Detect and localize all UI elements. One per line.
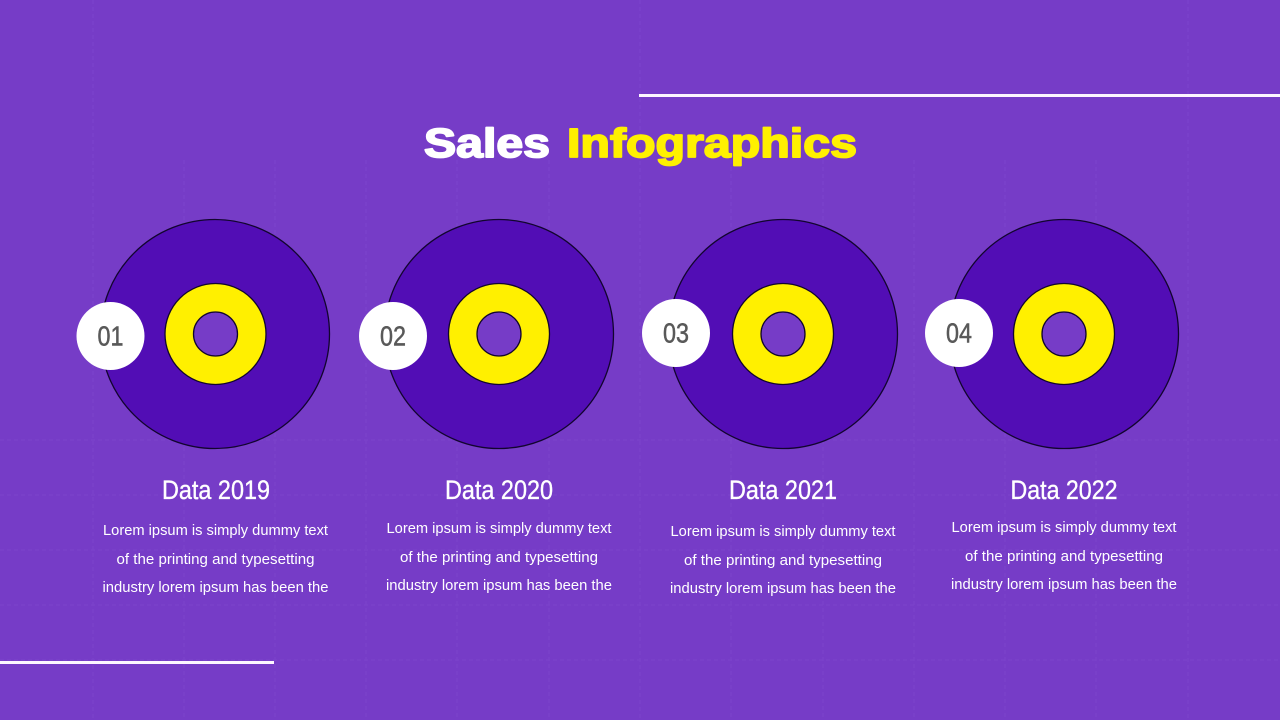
number badge 04 [925,299,993,367]
heading 2021: Data 2021 [729,475,837,505]
top decorative line [639,94,1280,97]
heading 2019: Data 2019 [162,475,270,505]
item 1: Data 2019 [76,220,330,596]
title: Infographics [567,120,857,166]
item 4: Data 2022 [925,220,1178,593]
number badge 03 [642,299,710,367]
description 2020: industry lorem ipsum has been the [386,578,612,594]
description 2022: industry lorem ipsum has been the [951,577,1177,593]
description 2021 [670,524,896,597]
description 2020: of the printing and typesetting [400,550,598,566]
title: Sales [424,120,550,166]
item 3: Data 2021 [642,220,898,597]
description 2020: Lorem ipsum is simply dummy text [386,521,612,537]
donut chart 1 [100,220,330,448]
number badge 01: 01 [98,320,124,352]
heading 2020: Data 2020 [445,475,553,505]
description 2019: industry lorem ipsum has been the [102,580,328,596]
donut chart 3 [668,220,898,448]
number badge 02 [359,302,427,370]
description 2022: of the printing and typesetting [965,549,1163,565]
description 2022: Lorem ipsum is simply dummy text [952,520,1176,536]
bottom decorative line [0,661,274,664]
description 2022 [951,520,1177,593]
number badge 03: 03 [663,318,689,348]
number badge 04: 04 [946,318,972,348]
description 2021: Lorem ipsum is simply dummy text [670,524,896,540]
number badge 01 [76,302,144,370]
description 2021: industry lorem ipsum has been the [670,581,896,597]
item 2: Data 2020 [359,220,614,594]
description 2020 [386,521,612,594]
donut chart 4 [950,220,1178,448]
description 2019 [102,523,328,596]
donut chart 2 [384,220,614,448]
heading 2022: Data 2022 [1010,475,1118,505]
description 2019: Lorem ipsum is simply dummy text [103,523,328,539]
description 2019: of the printing and typesetting [116,552,314,568]
title [424,120,857,166]
description 2021: of the printing and typesetting [684,553,882,569]
number badge 02: 02 [380,320,406,352]
